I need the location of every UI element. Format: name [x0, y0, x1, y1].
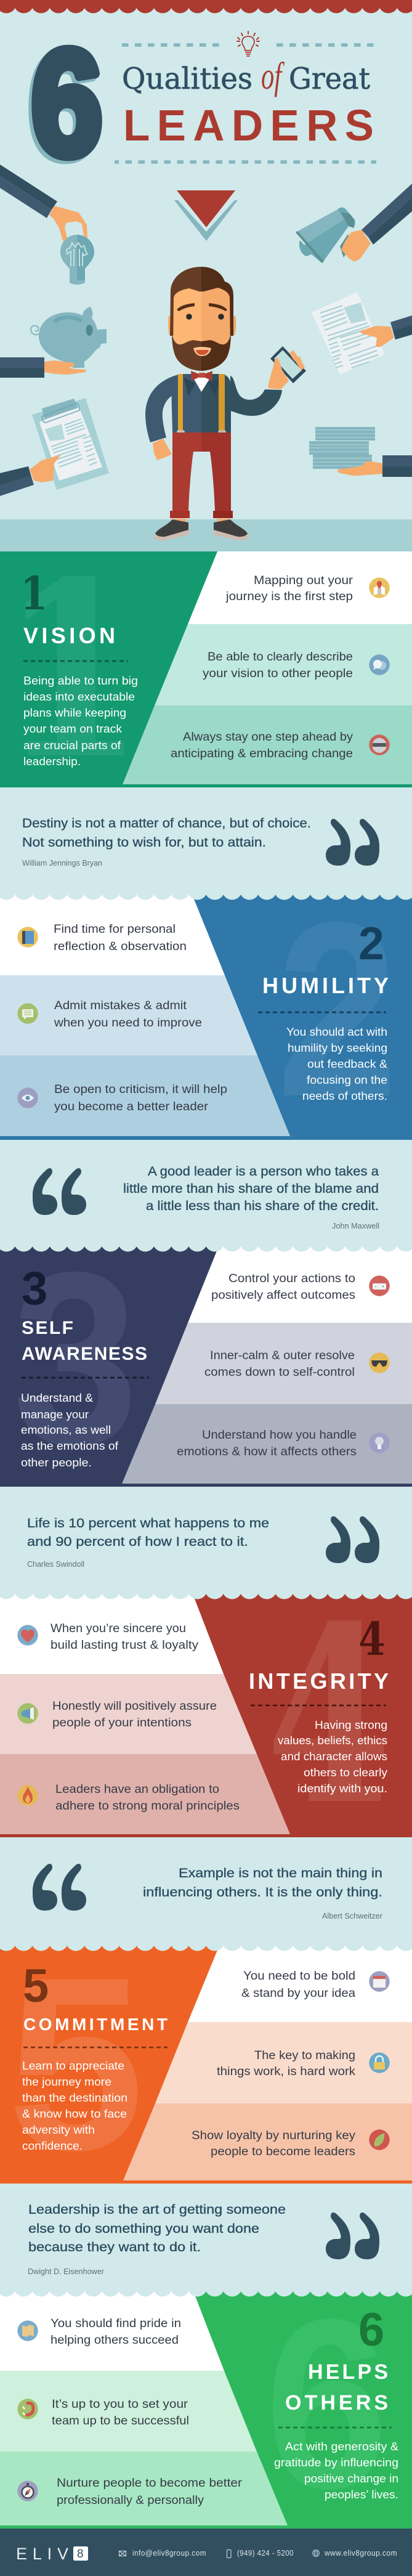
row: You need to be bold: You need to be bold — [243, 1970, 355, 1983]
illustration: hand with stack of papers — [309, 427, 412, 477]
row: Show loyalty: people to become leaders — [211, 2145, 355, 2158]
logo: ELIV8: ELIV — [16, 2545, 68, 2563]
row: Show loyalty: Show loyalty by nurturing key — [192, 2129, 356, 2142]
description — [274, 2440, 398, 2501]
heading SELF AWARENESS: SELF — [22, 1318, 73, 1338]
row: Nurture people — [0, 2452, 288, 2525]
heading VISION: VISION — [23, 623, 115, 648]
numeral 4: 4 — [358, 1613, 386, 1666]
mouth — [193, 347, 211, 356]
dashed rule — [23, 2047, 168, 2048]
cuffs — [170, 511, 190, 518]
hair — [170, 267, 201, 336]
dashed rule — [278, 2427, 392, 2428]
heading HELPS OTHERS: OTHERS — [285, 2391, 388, 2415]
panel: 3 Self Awareness — [0, 1221, 412, 1496]
watermark numeral 6: 6 — [265, 2269, 389, 2538]
row: Inner-calm: comes down to self-control — [204, 1366, 355, 1379]
description: as the emotions of — [21, 1440, 119, 1452]
left ear — [168, 316, 172, 335]
row: Control your actions: Control your actions to — [228, 1272, 355, 1285]
panel: 6 Helps Others — [0, 2269, 412, 2538]
description: positive change in — [304, 2472, 398, 2485]
row: The key to making — [155, 2022, 412, 2103]
icon: sunglasses — [369, 1352, 390, 1373]
top scalloped band — [0, 0, 412, 13]
eyes — [186, 314, 192, 320]
dashed rule — [23, 660, 128, 662]
panel: 5 Commitment — [0, 1926, 412, 2201]
quote: John Maxwell — [33, 1164, 379, 1230]
illustration: hand with megaphone — [296, 184, 412, 263]
title word LEADERS: LEADERS — [123, 102, 374, 150]
icon: globe — [313, 2550, 319, 2557]
panel background — [0, 1946, 412, 2184]
row: Understand how you handle: Understand how you handle — [202, 1429, 357, 1442]
icon: closing quote mark — [326, 819, 379, 866]
pants — [172, 433, 201, 511]
quote text: Example is not the main thing in — [179, 1866, 382, 1880]
description: others to clearly — [304, 1766, 387, 1779]
big numeral 6: 6 — [28, 23, 100, 190]
row: Admit mistakes: Admit mistakes & admit — [54, 999, 187, 1012]
description: and character allows — [281, 1750, 387, 1763]
row: Control your actions: positively affect outcomes — [211, 1289, 355, 1302]
heading HELPS OTHERS — [285, 2360, 388, 2415]
heading INTEGRITY: INTEGRITY — [249, 1668, 389, 1694]
description: Understand & — [21, 1392, 93, 1404]
row: Show loyalty — [123, 2103, 412, 2180]
dashed rule — [22, 1377, 149, 1378]
attribution: Charles Swindoll — [27, 1559, 84, 1569]
panel: 1 Vision — [0, 529, 412, 813]
panel: 2 Humility — [0, 871, 412, 1148]
row: Always stay one step ahead: anticipating & embracing change — [171, 747, 353, 760]
description: focusing on the — [307, 1074, 387, 1086]
icon: flame — [17, 1785, 38, 1806]
icon: light bulb — [369, 1432, 390, 1453]
description: the journey more — [22, 2076, 111, 2088]
row: It's up to you: It’s up to you to set your — [52, 2398, 188, 2411]
row: Be open to criticism: Be open to criticism, it will help — [54, 1083, 227, 1096]
numeral 1: 1 — [20, 567, 47, 620]
description — [278, 1719, 387, 1795]
quote text: Leadership is the art of getting someone — [28, 2203, 286, 2217]
website: www.eliv8group.com — [324, 2549, 397, 2558]
phone number: (949) 424 - 5200 — [237, 2549, 294, 2558]
heading SELF AWARENESS: AWARENESS — [22, 1344, 147, 1364]
description: identify with you. — [297, 1782, 387, 1795]
row: When you're sincere: build lasting trust & loyalty — [50, 1639, 199, 1652]
description: peoples’ lives. — [325, 2489, 398, 2501]
icon: calendar — [369, 1971, 390, 1992]
attribution: Albert Schweitzer — [322, 1911, 383, 1920]
description: adversity with — [22, 2124, 95, 2136]
icon: game controller — [369, 1275, 390, 1296]
suspenders — [178, 374, 183, 431]
row: Be open to criticism: you become a better leader — [54, 1100, 209, 1113]
description: You should act with — [286, 1026, 387, 1038]
beard — [172, 333, 201, 371]
row: It's up to you — [0, 2371, 257, 2452]
quote text: Destiny is not a matter of chance, but of choice. — [22, 816, 311, 831]
icon: chat bubbles — [369, 654, 390, 675]
quote: Dwight D. Eisenhower: else to do something you want done — [28, 2222, 259, 2236]
heading HUMILITY: HUMILITY — [262, 973, 389, 998]
numeral 6: 6 — [358, 2304, 384, 2356]
description: than the destination — [22, 2092, 127, 2104]
description: Being able to turn big — [23, 675, 138, 687]
description: other people. — [21, 1457, 92, 1469]
row: Mapping out your journey — [188, 551, 412, 624]
icon: leaf — [369, 2129, 390, 2150]
row: Be able to clearly describe: Be able to clearly describe — [208, 651, 353, 664]
row: Leaders have an obligation — [0, 1754, 290, 1834]
footer — [0, 2529, 412, 2576]
row: Inner-calm — [155, 1323, 412, 1404]
illustration: bearded leader figure — [145, 267, 306, 540]
row: Honestly: people of your intentions — [52, 1717, 192, 1729]
eyebrows — [177, 303, 195, 311]
description: confidence. — [22, 2140, 83, 2152]
illustration: hand with clipboard — [0, 398, 109, 496]
watermark numeral 4: 4 — [266, 1572, 391, 1858]
row: Admit mistakes — [0, 975, 257, 1055]
description: Act with generosity & — [285, 2440, 398, 2453]
illustration: hand with light bulb — [0, 165, 94, 285]
illustration: hand with piggy bank — [0, 307, 107, 378]
face — [173, 288, 201, 370]
row: Always stay one step ahead: Always stay one step ahead by — [183, 731, 353, 744]
numeral 5: 5 — [23, 1960, 49, 2012]
dashed rule — [251, 1705, 386, 1706]
dashed rule bottom — [115, 160, 376, 164]
scallop edge — [0, 1245, 412, 1251]
icon: heart — [17, 1625, 38, 1646]
description: & know how to face — [22, 2108, 127, 2120]
down arrow triangle — [174, 190, 238, 241]
right arm — [230, 376, 282, 416]
footer background — [0, 2529, 412, 2576]
description: plans while keeping — [23, 707, 126, 719]
row: Be able to clearly describe — [155, 624, 412, 705]
panel background — [0, 551, 412, 787]
numeral 2: 2 — [358, 917, 384, 969]
panel background — [0, 895, 412, 1140]
title word of: of — [261, 55, 285, 97]
description — [286, 1026, 387, 1102]
left hand — [153, 439, 172, 460]
row: Nurture people: Nurture people to become better — [57, 2477, 243, 2490]
row: Mapping out your journey: journey is the first step — [225, 590, 353, 603]
watermark numeral 2: 2 — [277, 871, 398, 1148]
description: ideas into executable — [23, 691, 135, 703]
panel background — [0, 1246, 412, 1487]
description: Having strong — [315, 1719, 387, 1731]
dashed rule top left — [122, 43, 219, 47]
icon: megaphone — [17, 1703, 38, 1724]
row: Inner-calm: Inner-calm & outer resolve — [210, 1349, 355, 1362]
title word Great: Great — [289, 62, 370, 96]
description: needs of others. — [302, 1090, 387, 1102]
icon: envelope — [119, 2551, 126, 2556]
row: Admit mistakes: when you need to improve — [54, 1017, 202, 1030]
row: Honestly — [0, 1674, 257, 1754]
attribution: Dwight D. Eisenhower — [28, 2267, 105, 2276]
dashed rule top right — [277, 43, 374, 47]
icon: opening quote mark — [33, 1864, 86, 1911]
description: Learn to appreciate — [22, 2060, 124, 2072]
row: You should find pride: helping others succeed — [50, 2334, 179, 2347]
logo: ELIV8: 8 — [77, 2548, 84, 2561]
description: values, beliefs, ethics — [278, 1734, 387, 1747]
row: You should find pride — [0, 2291, 224, 2371]
watermark numeral 3: 3 — [12, 1221, 139, 1496]
row: Mapping out your journey: Mapping out your — [254, 574, 353, 587]
watermark numeral 1: 1 — [0, 529, 145, 813]
quote: Charles Swindoll: and 90 percent of how I react to it. — [27, 1535, 248, 1549]
title word Qualities: Qualities — [122, 62, 252, 96]
quote: Charles Swindoll — [27, 1516, 379, 1569]
quote: John Maxwell: little more than his share of the blame and — [123, 1182, 379, 1196]
icon: helmet — [369, 734, 390, 755]
numeral 3: 3 — [22, 1262, 47, 1315]
row: Find time for personal reflection: reflection & observation — [54, 940, 187, 953]
row: The key to making: The key to making — [254, 2049, 355, 2062]
row: Honestly: Honestly will positively assure — [52, 1700, 217, 1713]
row: Find time for personal reflection: Find time for personal — [54, 923, 176, 936]
floor band — [0, 519, 412, 551]
row: You need to be bold: & stand by your idea — [241, 1987, 355, 2000]
row: Nurture people: professionally & personally — [57, 2494, 204, 2507]
description: your team on track — [23, 723, 123, 735]
heading HELPS OTHERS: HELPS — [308, 2360, 388, 2384]
torso — [171, 374, 201, 433]
description: out feedback & — [307, 1058, 387, 1070]
shoes — [154, 521, 189, 540]
scallop edge — [0, 2290, 412, 2296]
scallop edge — [0, 1944, 412, 1951]
description: manage your — [21, 1408, 89, 1421]
vest lapels — [184, 377, 220, 396]
description: humility by seeking — [288, 1042, 387, 1054]
description: leadership. — [23, 755, 81, 768]
pig body — [39, 307, 107, 368]
bow tie — [191, 371, 212, 381]
row: You need to be bold — [188, 1946, 412, 2022]
quote: Dwight D. Eisenhower: because they want to do it. — [28, 2240, 201, 2254]
icon: map pin — [369, 577, 390, 598]
quote: Albert Schweitzer — [33, 1864, 383, 1920]
icon: compass — [17, 2481, 38, 2501]
ankles — [174, 519, 186, 527]
icon: list bubble — [17, 1003, 38, 1024]
heading SELF AWARENESS — [22, 1318, 147, 1364]
panel background — [0, 1594, 412, 1837]
row: The key to making: things work, is hard work — [217, 2065, 356, 2078]
icon: padlock — [369, 2052, 390, 2073]
quote text: A good leader is a person who takes a — [148, 1164, 379, 1179]
scallop edge — [0, 893, 412, 900]
row: It's up to you: team up to be successful — [52, 2415, 189, 2428]
quote: William Jennings Bryan: Not something to wish for, but to attain. — [22, 835, 266, 850]
smartphone — [270, 346, 306, 383]
quote: John Maxwell: a little less than his share of the credit. — [146, 1199, 379, 1213]
row: When you're sincere: When you’re sincere you — [50, 1622, 186, 1635]
phone hand — [268, 358, 289, 389]
icon: magnet — [17, 2399, 38, 2420]
description — [22, 2060, 127, 2152]
icon: eye — [17, 1087, 38, 1108]
illustration: hand with newspaper — [312, 292, 412, 375]
row: Understand how you handle — [122, 1404, 412, 1484]
left arm — [145, 374, 180, 442]
icon: closing quote mark — [326, 1516, 379, 1563]
icon: folded map — [17, 2320, 38, 2341]
icon: closing quote mark — [326, 2212, 379, 2259]
description: emotions, as well — [21, 1424, 111, 1436]
icon: opening quote mark — [33, 1168, 86, 1215]
row: You should find pride: You should find pride in — [50, 2317, 181, 2330]
row: Leaders have an obligation: Leaders have an obligation to — [55, 1783, 219, 1796]
title block — [28, 20, 376, 190]
description: are crucial parts of — [23, 739, 121, 752]
big numeral 6: 6 — [31, 20, 103, 187]
description — [23, 675, 138, 768]
icon: title light bulb — [237, 31, 259, 56]
row: Be able to clearly describe: your vision to other people — [203, 667, 353, 680]
icon: phone — [227, 2550, 231, 2558]
pig tail — [31, 326, 39, 335]
quote text: Life is 10 percent what happens to me — [27, 1516, 269, 1530]
panel background — [0, 2291, 412, 2529]
description: gratitude by influencing — [274, 2456, 398, 2469]
heading COMMITMENT: COMMITMENT — [23, 2015, 168, 2034]
icon: notebook — [17, 927, 38, 948]
row: Be open to criticism — [0, 1055, 290, 1136]
row: Always stay one step ahead — [123, 705, 412, 784]
quote: Albert Schweitzer: influencing others. It is the only thing. — [143, 1885, 382, 1899]
shirt — [192, 374, 212, 392]
row: Control your actions — [188, 1246, 412, 1323]
scallop edge — [0, 1593, 412, 1599]
panel: 4 Integrity — [0, 1572, 412, 1858]
row: Find time for personal reflection — [0, 895, 225, 975]
attribution: John Maxwell — [332, 1221, 379, 1230]
row: Leaders have an obligation: adhere to strong moral principles — [55, 1800, 240, 1813]
right ear — [232, 316, 236, 335]
row: Understand how you handle: emotions & how it affects others — [177, 1445, 357, 1458]
attribution: William Jennings Bryan — [22, 858, 102, 867]
watermark numeral 5: 5 — [7, 1926, 144, 2201]
description — [21, 1392, 119, 1469]
quote: Dwight D. Eisenhower — [28, 2203, 379, 2276]
row: When you're sincere — [0, 1594, 224, 1674]
dashed rule — [258, 1012, 386, 1013]
email: info@eliv8group.com — [132, 2549, 206, 2558]
quote: William Jennings Bryan — [22, 816, 379, 867]
